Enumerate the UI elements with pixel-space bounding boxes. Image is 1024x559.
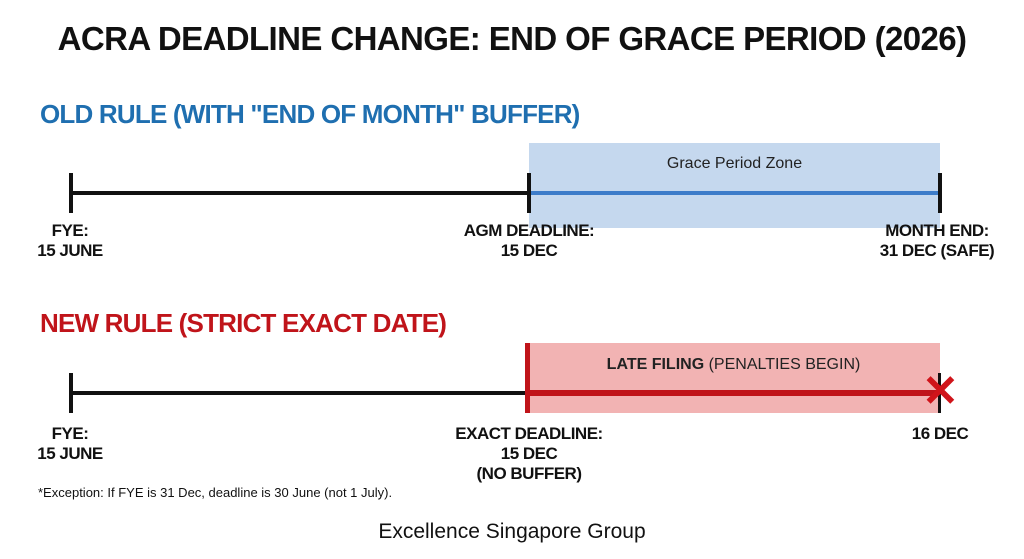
footer: Excellence Singapore Group — [378, 520, 646, 543]
old labels: FYE: — [52, 221, 88, 240]
new labels: 15 JUNE — [37, 444, 103, 463]
new timeline — [69, 343, 959, 416]
new rule heading: NEW RULE (STRICT EXACT DATE) — [40, 308, 446, 338]
new labels: FYE: — [52, 424, 88, 443]
late filing zone: LATE FILING (PENALTIES BEGIN) — [607, 356, 860, 373]
grace period zone: Grace Period Zone — [667, 155, 802, 172]
old rule heading: OLD RULE (WITH "END OF MONTH" BUFFER) — [40, 99, 580, 129]
text: AGM DEADLINE: — [464, 221, 594, 240]
text: MONTH END: — [885, 221, 989, 240]
footnote: *Exception: If FYE is 31 Dec, deadline is 30 June (not 1 July). — [38, 485, 392, 500]
text: 31 DEC (SAFE) — [880, 241, 994, 260]
text: 15 DEC — [501, 444, 557, 463]
grace period zone — [529, 143, 940, 228]
text: (NO BUFFER) — [476, 464, 581, 483]
title: ACRA DEADLINE CHANGE: END OF GRACE PERIOD (2026) — [58, 20, 966, 57]
old labels: 15 JUNE — [37, 241, 103, 260]
new labels — [37, 424, 103, 463]
icon: red X: ✕ — [922, 367, 959, 416]
old timeline — [69, 173, 942, 213]
text: EXACT DEADLINE: — [455, 424, 603, 443]
old labels — [37, 221, 103, 260]
late filing zone — [527, 343, 940, 413]
text: 15 DEC — [501, 241, 557, 260]
text: 16 DEC — [912, 424, 968, 443]
